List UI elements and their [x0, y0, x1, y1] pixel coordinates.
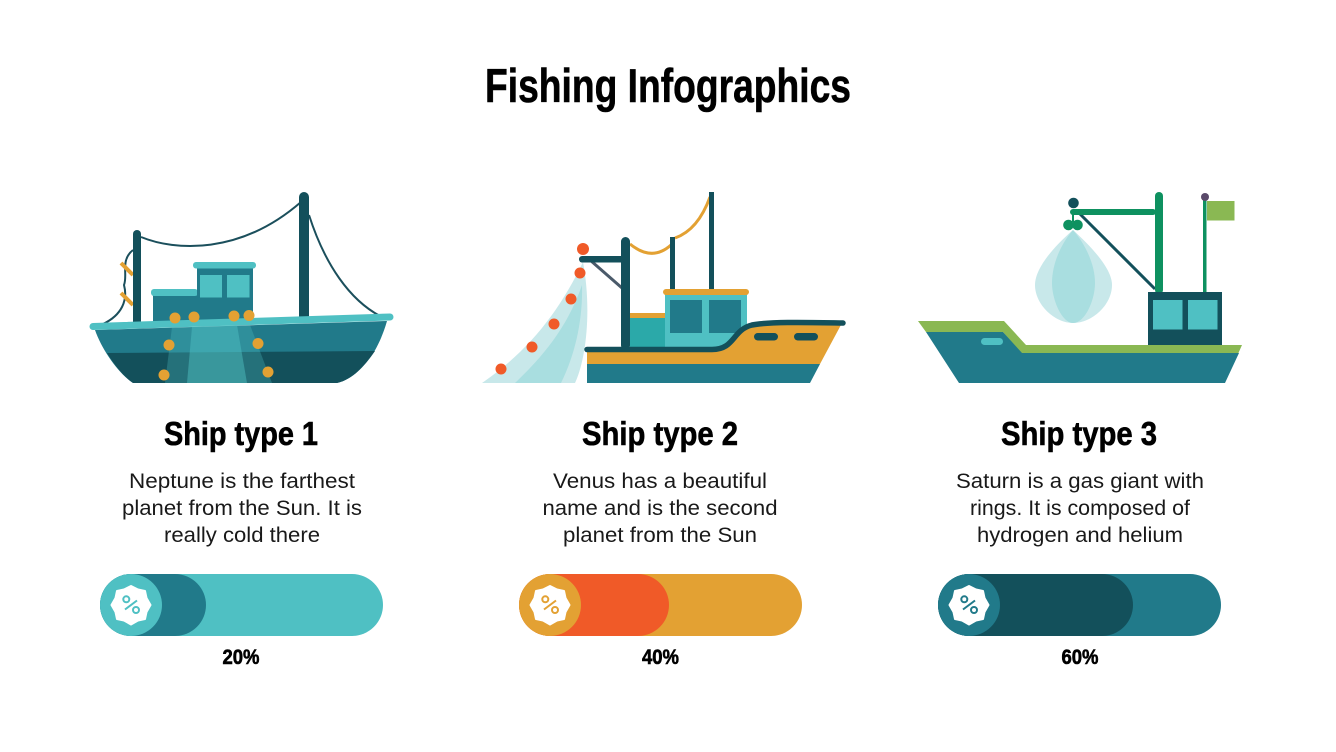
progress bar: 20%	[100, 574, 383, 636]
progress bar: 40%	[519, 574, 802, 636]
text block: ship type 3 description: rings. It is composed of	[970, 497, 1190, 520]
text block: ship type 3 description: hydrogen and helium	[977, 524, 1183, 547]
text block: ship type 3 description: Saturn is a gas giant with	[956, 470, 1204, 493]
illustration: ship type 2	[482, 192, 843, 383]
text block: ship type 3 description	[956, 470, 1204, 547]
text block: ship type 2 description	[542, 470, 778, 547]
title: Fishing Infographics	[485, 59, 851, 112]
icon: percent badge	[950, 586, 988, 624]
icon: percent badge	[530, 586, 570, 624]
heading: ship type 2: Ship type 2	[582, 415, 738, 452]
text block: ship type 1 description: really cold there	[164, 524, 320, 547]
icon: percent badge	[112, 586, 150, 624]
text block: ship type 2 description: Venus has a beautiful	[553, 470, 767, 493]
text block: ship type 2 description: planet from the Sun	[563, 524, 757, 547]
heading: ship type 1: Ship type 1	[164, 415, 318, 452]
text block: ship type 1 description: planet from the Sun. It is	[122, 497, 362, 520]
percentage label: 60%: 60%	[1062, 646, 1099, 669]
progress bar: 60%	[938, 574, 1221, 636]
illustration: ship type 1	[90, 192, 394, 383]
heading: ship type 3: Ship type 3	[1001, 415, 1157, 452]
percentage label: 40%: 40%	[642, 646, 679, 669]
text block: ship type 1 description: Neptune is the farthest	[129, 470, 355, 493]
text block: ship type 1 description	[122, 470, 362, 547]
text block: ship type 2 description: name and is the second	[542, 497, 778, 520]
percentage label: 20%: 20%	[222, 646, 260, 669]
illustration: ship type 3	[918, 192, 1242, 383]
